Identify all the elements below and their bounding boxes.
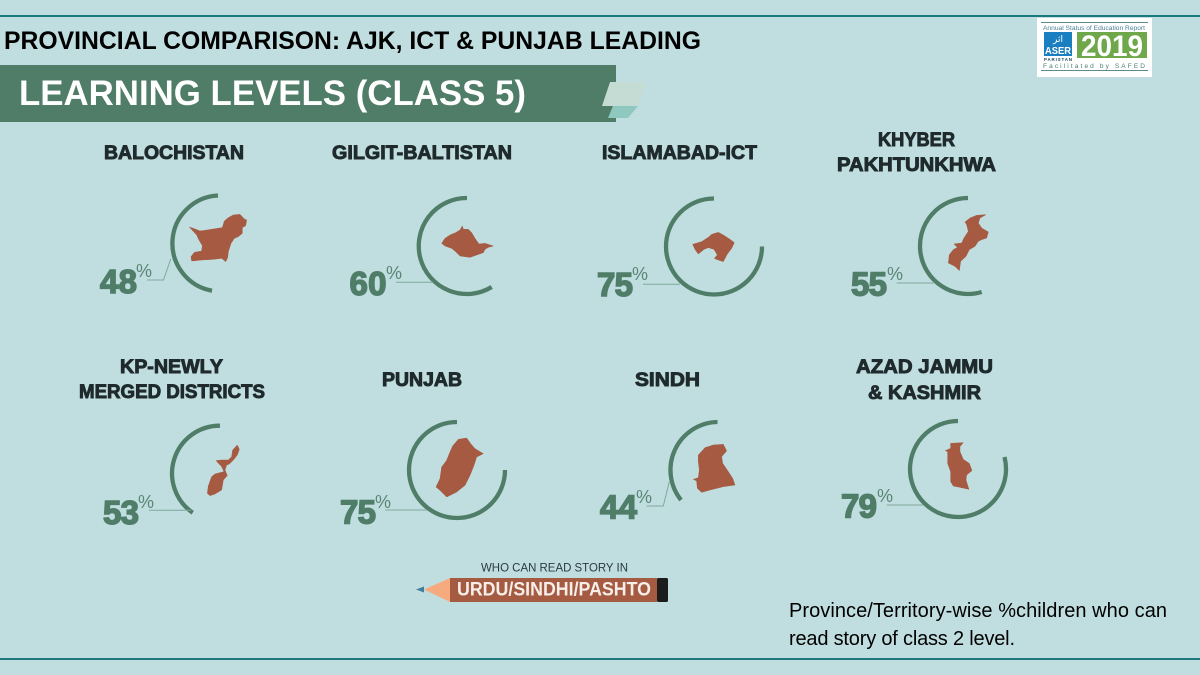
panel: Islamabad-ICT: 75 — [597, 266, 633, 303]
panel: Khyber Pakhtunkhwa: PAKHTUNKHWA — [837, 155, 996, 176]
panel: Sindh: 44 — [600, 488, 638, 525]
panel: Balochistan: BALOCHISTAN — [104, 143, 244, 164]
panel: Sindh — [600, 370, 735, 525]
logo: ASER 2019: Annual Status of Education Report — [1043, 25, 1145, 32]
note: description: Province/Territory-wise %children who can — [789, 600, 1167, 622]
logo: ASER 2019: PARISTAN — [1044, 57, 1072, 62]
panel: Balochistan: 48 — [100, 263, 137, 300]
panel: Gilgit-Baltistan — [332, 143, 512, 302]
panel: KP-Newly Merged Districts: 53 — [103, 494, 139, 531]
panel: Khyber Pakhtunkhwa: % — [887, 264, 903, 284]
panel: KP-Newly Merged Districts: % — [138, 492, 154, 512]
panel: Balochistan — [100, 143, 247, 300]
pencil legend: URDU/SINDHI/PASHTO — [457, 580, 651, 601]
panel: Islamabad-ICT: ISLAMABAD-ICT — [602, 143, 757, 164]
title: PROVINCIAL COMPARISON: AJK, ICT & PUNJAB LEADING — [4, 27, 701, 55]
panel: Punjab: PUNJAB — [382, 370, 462, 391]
banner: learning levels — [0, 65, 647, 122]
panel: Islamabad-ICT — [597, 143, 762, 303]
logo: ASER 2019: Facilitated by SAFED — [1043, 63, 1145, 70]
pencil legend: WHO CAN READ STORY IN — [481, 561, 628, 575]
panel: Islamabad-ICT: % — [632, 264, 648, 284]
panel: Azad Jammu & Kashmir: & KASHMIR — [868, 383, 981, 404]
panel: Sindh: SINDH — [635, 370, 700, 391]
note: description: read story of class 2 level. — [789, 628, 1015, 650]
pencil legend — [416, 561, 668, 602]
panel: Gilgit-Baltistan: % — [386, 263, 402, 283]
banner heading: LEARNING LEVELS (CLASS 5) — [19, 74, 526, 113]
panel: Sindh: % — [636, 487, 652, 507]
panel: Gilgit-Baltistan: 60 — [350, 265, 386, 302]
panel: Azad Jammu & Kashmir: % — [877, 486, 893, 506]
panel: Punjab — [340, 370, 505, 530]
panel: Khyber Pakhtunkhwa — [837, 130, 996, 303]
logo: ASER 2019: اثر — [1052, 34, 1063, 44]
panel: Balochistan: % — [136, 261, 152, 281]
panel: Punjab: 75 — [340, 493, 376, 530]
panel: Gilgit-Baltistan: GILGIT-BALTISTAN — [332, 143, 512, 164]
logo: ASER 2019: ASER — [1045, 46, 1072, 57]
panel: KP-Newly Merged Districts — [79, 357, 265, 531]
panel: Azad Jammu & Kashmir: 79 — [841, 488, 877, 525]
panel: KP-Newly Merged Districts: KP-NEWLY — [120, 357, 223, 378]
panel: Azad Jammu & Kashmir — [841, 357, 1006, 525]
panel: Khyber Pakhtunkhwa: 55 — [851, 266, 887, 303]
logo: ASER 2019: 2019 — [1081, 30, 1143, 63]
logo: ASER 2019 — [1037, 18, 1152, 77]
note: description — [789, 600, 1167, 650]
panel: Azad Jammu & Kashmir: AZAD JAMMU — [856, 357, 993, 378]
panel: Khyber Pakhtunkhwa: KHYBER — [878, 130, 955, 151]
panel: Punjab: % — [375, 492, 391, 512]
panel: KP-Newly Merged Districts: MERGED DISTRICTS — [79, 382, 265, 403]
